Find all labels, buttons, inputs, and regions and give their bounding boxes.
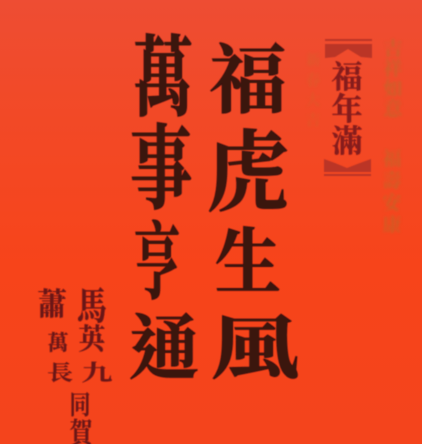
signature: 蕭萬長: 萬 <box>47 331 69 355</box>
faded left column text: 吉 <box>305 111 321 129</box>
signature: 蕭萬長: 蕭 <box>37 287 67 322</box>
banner top ornament <box>325 39 372 58</box>
main couplet left column: 萬事亨通: 亨 <box>134 217 180 310</box>
faded right column text: 祥 <box>383 58 403 80</box>
faded right column text: 康 <box>382 214 402 236</box>
faded right column text <box>382 38 403 236</box>
faded left column text: 大 <box>305 91 321 109</box>
main couplet left column: 萬事亨通: 萬 <box>133 31 193 128</box>
faded left column text: 新 <box>305 52 321 69</box>
main couplet right column: 福虎生風: 風 <box>211 311 299 388</box>
faded left column text: 春 <box>305 71 321 89</box>
signature: 馬英九 同賀: 馬 <box>77 286 107 328</box>
faded right column text: 壽 <box>382 170 402 192</box>
main couplet right column: 福虎生風: 生 <box>215 223 281 303</box>
signature: 馬英九 同賀: 英 <box>79 323 106 356</box>
signature: 馬英九 同賀 <box>69 286 113 444</box>
signature: 馬英九 同賀: 同 <box>70 391 90 420</box>
banner title: 滿 <box>332 124 362 159</box>
faded right column text: 如 <box>383 78 403 100</box>
faded right column text: 福 <box>382 148 402 170</box>
main couplet right column: 福虎生風 <box>207 40 299 388</box>
signature: 馬英九 同賀: 九 <box>82 361 113 385</box>
banner title: 年 <box>332 92 362 127</box>
faded right column text: 安 <box>382 192 402 214</box>
signature: 蕭萬長: 長 <box>47 361 73 385</box>
banner title <box>332 60 362 159</box>
banner: 福年滿 <box>324 39 372 176</box>
banner title: 福 <box>332 60 362 95</box>
main couplet right column: 福虎生風: 虎 <box>207 125 289 223</box>
main couplet left column: 萬事亨通: 事 <box>130 119 192 221</box>
main couplet left column: 萬事亨通: 通 <box>129 312 199 389</box>
main couplet left column: 萬事亨通 <box>129 31 199 389</box>
main couplet right column: 福虎生風: 福 <box>210 40 286 123</box>
faded left column text <box>305 52 321 129</box>
faded right column text: 吉 <box>383 38 403 60</box>
signature: 蕭萬長 <box>37 287 73 385</box>
banner bottom ornament <box>324 159 371 176</box>
faded right column text: 意 <box>383 97 403 120</box>
